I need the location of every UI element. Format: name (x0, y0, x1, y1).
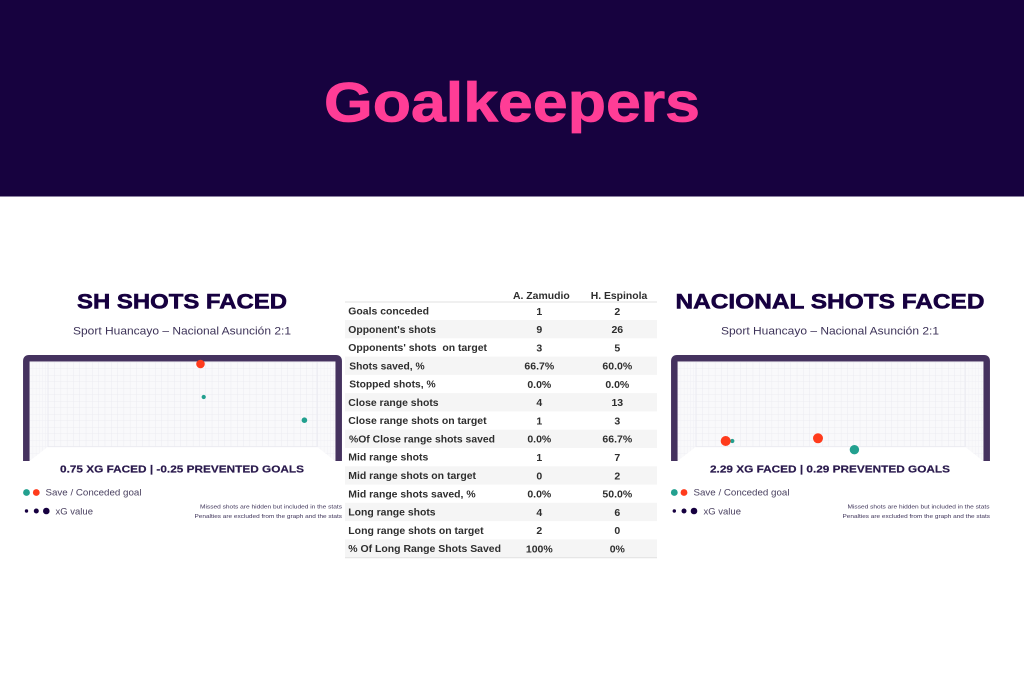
row: mid range shots (348, 452, 620, 464)
row: close range saved: 66.7% (602, 434, 633, 446)
row: close range shots: 13 (611, 397, 623, 409)
row: long range saved: 0% (610, 543, 626, 555)
row: long range shots: 6 (614, 507, 620, 519)
row: opponents' shots on target: 3 (536, 342, 542, 354)
footnotes: Penalties are excluded from the graph and the stats (194, 514, 342, 520)
row: close range saved (349, 433, 633, 446)
shot: conceded goal centre (813, 433, 823, 443)
panel: Nacional shots faced (671, 290, 990, 520)
row: opponent's shots: 26 (611, 324, 623, 336)
shot: save large (850, 445, 859, 454)
row: stopped shots (349, 379, 630, 391)
panel: stats table (345, 290, 657, 558)
row: close range shots on target: 3 (614, 416, 620, 428)
row: close range saved: %Of Close range shots saved (349, 433, 495, 445)
row: long range shots on target: 0 (614, 525, 620, 537)
shot: save medium (302, 417, 307, 423)
row: shots saved: 66.7% (524, 361, 555, 373)
footnotes (842, 504, 990, 520)
match subtitle: Sport Huancayo – Nacional Asunción 2:1 (721, 326, 939, 338)
row: mid range saved: 50.0% (602, 489, 633, 501)
row: shots saved: Shots saved, % (349, 360, 425, 372)
legend: save / conceded: Save / Conceded goal (46, 488, 142, 498)
table header: A. Zamudio (513, 290, 570, 302)
row: opponents' shots on target: Opponents' shots on target (348, 342, 487, 354)
shot: conceded goal (196, 360, 205, 368)
row: mid range saved: 0.0% (527, 489, 552, 501)
row: long range shots (348, 507, 620, 519)
row: close range shots on target: 1 (536, 416, 542, 428)
shot: save small (202, 395, 206, 399)
table row shading (345, 320, 657, 558)
footnotes: Penalties are excluded from the graph and the stats (842, 514, 990, 520)
row: mid range shots on target (348, 470, 620, 482)
row: opponent's shots: 9 (536, 324, 542, 336)
row: goals conceded (348, 306, 620, 318)
row: shots saved (349, 360, 633, 373)
panel: SH shots faced (23, 290, 342, 520)
row: goals conceded: 1 (536, 306, 542, 318)
row: close range shots (348, 397, 623, 409)
table header: H. Espinola (591, 290, 647, 302)
row: mid range saved (348, 488, 633, 501)
footnotes: Missed shots are hidden but included in the stats (200, 504, 342, 510)
legend: xG value (673, 506, 741, 516)
row: goals conceded: 2 (614, 306, 620, 318)
row: mid range shots: 7 (614, 452, 620, 464)
shot: conceded goal left (721, 436, 731, 446)
row: long range shots on target: Long range shots on target (348, 525, 484, 537)
row: opponent's shots: Opponent's shots (348, 324, 436, 336)
goal chart (674, 358, 987, 461)
row: goals conceded: Goals conceded (348, 306, 429, 318)
row: close range shots on target: Close range shots on target (348, 415, 487, 427)
row: mid range shots on target: 0 (536, 470, 542, 482)
xG summary: 0.75 XG FACED | -0.25 PREVENTED GOALS (60, 465, 304, 476)
header banner (0, 0, 1024, 196)
row: close range shots: 4 (536, 397, 542, 409)
row: opponent's shots (348, 324, 623, 336)
row: long range shots on target: 2 (536, 525, 542, 537)
shot: save small (730, 439, 734, 443)
row: opponents' shots on target (348, 342, 620, 354)
row: close range shots on target (348, 415, 620, 428)
legend: xG value (25, 506, 93, 516)
title: Goalkeepers (324, 70, 700, 134)
row: long range saved: % Of Long Range Shots Saved (348, 543, 501, 555)
table header (513, 290, 647, 302)
heading: Nacional shots faced: NACIONAL SHOTS FACED (676, 290, 984, 314)
match subtitle: Sport Huancayo – Nacional Asunción 2:1 (73, 326, 291, 338)
footnotes (194, 504, 342, 520)
row: shots saved: 60.0% (602, 361, 633, 373)
row: long range shots: 4 (536, 507, 542, 519)
row: long range saved (348, 543, 626, 555)
row: opponents' shots on target: 5 (614, 342, 620, 354)
row: stopped shots: 0.0% (527, 379, 552, 391)
legend: save / conceded: Save / Conceded goal (694, 488, 790, 498)
row: mid range saved: Mid range shots saved, % (348, 488, 476, 500)
row: long range saved: 100% (526, 543, 553, 555)
row: close range shots: Close range shots (348, 397, 439, 409)
row: mid range shots: 1 (536, 452, 542, 464)
row: mid range shots on target: 2 (614, 470, 620, 482)
goal chart (26, 358, 339, 461)
row: mid range shots on target: Mid range shots on target (348, 470, 477, 482)
row: long range shots on target (348, 525, 620, 537)
row: stopped shots: Stopped shots, % (349, 379, 436, 391)
footnotes: Missed shots are hidden but included in the stats (848, 504, 990, 510)
row: long range shots: Long range shots (348, 507, 436, 519)
row: mid range shots: Mid range shots (348, 452, 428, 464)
xG summary: 2.29 XG FACED | 0.29 PREVENTED GOALS (710, 465, 950, 476)
legend: xG value: xG value (704, 506, 741, 516)
row: close range saved: 0.0% (527, 434, 552, 446)
row: stopped shots: 0.0% (605, 379, 630, 391)
legend: xG value: xG value (56, 506, 93, 516)
heading: SH shots faced: SH SHOTS FACED (77, 290, 287, 314)
